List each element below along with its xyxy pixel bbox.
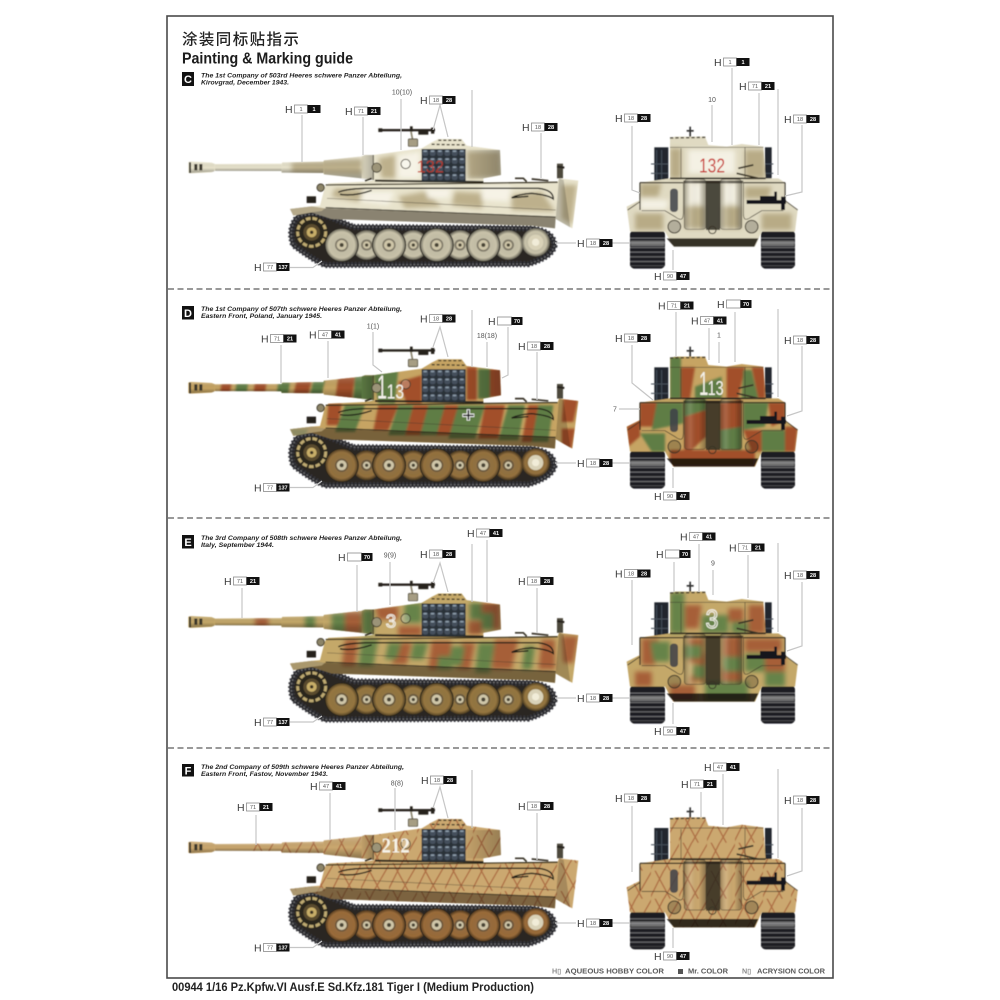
panel E heading: E <box>184 537 192 549</box>
callout: E rear H90 47: 47 <box>680 729 686 735</box>
callout: F rear H47 41: 41 <box>730 765 736 771</box>
tank E rear view <box>627 582 798 724</box>
callout: D rear H70: 70 <box>743 302 749 308</box>
footer title: 00944 1/16 Pz.Kpfw.VI Ausf.E Sd.Kfz.181 Tiger I (Medium Production) <box>172 981 534 994</box>
callout: C H1 1: H <box>285 104 293 116</box>
callout: F H18 28 hull: 28 <box>544 804 550 810</box>
callout: E rear H70 <box>656 549 690 592</box>
callout: E rear H18 28 left: 18 <box>628 572 634 578</box>
callout: F rear H18 28 right: 28 <box>810 798 816 804</box>
callout: F H77 137: H <box>254 942 262 954</box>
leader line C turret <box>471 90 473 147</box>
callout: F H18 28 tracks: H <box>577 918 585 930</box>
leader line C rear <box>777 89 779 175</box>
callout: F rear H47 41 <box>704 762 740 825</box>
callout: E decal 9(9) <box>384 552 396 605</box>
callout: D rear H18 28 left: 28 <box>641 336 647 342</box>
callout: F decal 8(8): 8(8) <box>391 780 403 788</box>
callout: D rear H47 41: 47 <box>704 318 710 324</box>
callout: D rear H18 28 right: 28 <box>810 338 816 344</box>
callout: C rear H18 28 left <box>615 113 650 193</box>
callout: E rear H90 47 <box>654 703 690 738</box>
callout: F H18 28 hull: 18 <box>531 804 537 810</box>
callout: C rear decal 10: 10 <box>708 97 716 104</box>
callout: D H71 21: 71 <box>274 336 280 342</box>
callout: C H77 137: 137 <box>278 265 288 271</box>
leader line F turret <box>471 770 473 828</box>
callout: D rear H47 41 <box>691 316 726 360</box>
callout: F H47 41: H <box>310 781 318 793</box>
callout: F H47 41: 41 <box>336 784 342 790</box>
callout: F H18 28 turret: 28 <box>447 778 453 784</box>
panel F heading <box>182 764 404 778</box>
callout: C rear H18 28 right: 28 <box>810 117 816 123</box>
legend: paint brands: Mr. COLOR <box>688 966 729 976</box>
callout: C rear H18 28 left: 18 <box>628 116 634 122</box>
callout: E H71 21: 71 <box>237 579 243 585</box>
panel C heading <box>182 72 402 86</box>
callout: E H70 <box>338 552 372 612</box>
tank D rear view: 13 <box>708 378 724 400</box>
legend: paint brands: ACRYSION COLOR <box>757 966 826 976</box>
tank D side view <box>188 347 578 485</box>
callout: E rear H47 41 <box>680 532 716 592</box>
legend: paint brands: N▯ <box>742 966 751 976</box>
callout: C H18 28 turret: 18 <box>433 98 439 104</box>
callout: E H18 28 turret: H <box>420 549 428 561</box>
callout: C rear H71 21: 21 <box>765 84 771 90</box>
callout: C H71 21: 71 <box>358 109 364 115</box>
callout: C rear H18 28 left: H <box>615 113 623 125</box>
callout: C rear H18 28 right: 18 <box>797 117 803 123</box>
callout: D H18 28 tracks: H <box>577 458 585 470</box>
callout: D rear H71 21: H <box>658 300 666 312</box>
callout: D H70 <box>488 316 522 378</box>
callout: F rear H18 28 right: 18 <box>797 798 803 804</box>
tank E side view <box>188 581 578 719</box>
leader line D turret <box>471 310 473 367</box>
tank F side view <box>188 806 582 945</box>
callout: D H71 21 <box>261 334 296 383</box>
callout: C rear H18 28 right: H <box>784 114 792 126</box>
callout: F H71 21: 21 <box>263 805 269 811</box>
callout: D rear decal 1: 1 <box>717 332 721 340</box>
callout: D H70: 70 <box>514 319 520 325</box>
callout: D H18 28 tracks: 28 <box>603 461 609 467</box>
callout: C decal 10(10): 10(10) <box>392 90 412 96</box>
tank E side view: 3 <box>386 610 396 631</box>
callout: C rear H1 1 <box>714 57 750 145</box>
callout: E H70: 70 <box>364 555 370 561</box>
tank F side view: 212 <box>382 836 410 858</box>
callout: C H18 28 tracks: H <box>577 238 585 250</box>
title: 涂装同标贴指示 <box>182 28 300 50</box>
panel C heading: The 1st Company of 503rd Heeres schwere Panzer Abteilung, <box>201 74 402 80</box>
leader line D rear <box>777 309 779 397</box>
tank C rear view <box>627 127 798 269</box>
callout: E H18 28 tracks: H <box>577 693 585 705</box>
callout: C rear H90 47: 47 <box>680 274 686 280</box>
callout: E rear H71 21 <box>729 542 764 598</box>
callout: C H18 28 hull <box>522 122 558 178</box>
leader line F rear <box>777 769 779 858</box>
callout: C H18 28 turret <box>420 95 456 137</box>
callout: C H71 21: H <box>345 106 353 118</box>
callout: C decal 10(10) <box>392 90 412 150</box>
callout: D rear H71 21: 21 <box>684 304 690 310</box>
callout: F H77 137: 137 <box>278 946 288 952</box>
callout: E H71 21: 21 <box>250 579 256 585</box>
callout: D decal 1(1) <box>367 324 382 372</box>
callout: F rear H18 28 right: H <box>784 795 792 807</box>
panel E heading: Italy, September 1944. <box>201 543 274 549</box>
title: Painting & Marking guide <box>182 50 353 68</box>
callout: D rear H18 28 left: H <box>615 333 623 345</box>
tank C rear view: 132 <box>699 155 725 178</box>
callout: E H18 28 hull: H <box>518 576 526 588</box>
callout: E rear H71 21: H <box>729 542 737 554</box>
panel F heading: F <box>185 766 192 778</box>
panel C heading: C <box>184 74 192 86</box>
callout: F rear H71 21 <box>681 779 716 817</box>
callout: E H77 137: 77 <box>267 720 273 726</box>
callout: F rear H90 47: 47 <box>680 954 686 960</box>
callout: F rear H47 41: H <box>704 762 712 774</box>
callout: D H18 28 hull: 18 <box>531 344 537 350</box>
callout: F rear H90 47: 90 <box>667 954 673 960</box>
panel E heading <box>182 535 402 549</box>
callout: C H18 28 hull: 28 <box>548 125 554 131</box>
callout: D rear H18 28 right: H <box>784 335 792 347</box>
callout: C rear H71 21: 71 <box>752 84 758 90</box>
callout: C H18 28 hull: 18 <box>535 125 541 131</box>
callout: C H77 137 <box>254 261 322 274</box>
callout: C rear H90 47: 90 <box>667 274 673 280</box>
tank E rear view: 3 <box>706 604 718 634</box>
callout: F rear H18 28 left <box>615 793 650 872</box>
callout: F H71 21: 71 <box>250 805 256 811</box>
callout: D H18 28 tracks <box>555 458 630 470</box>
callout: E H77 137: 137 <box>278 720 288 726</box>
tank D side view: 13 <box>387 382 404 404</box>
callout: D rear H71 21 <box>658 300 694 357</box>
callout: D rear H18 28 right: 18 <box>797 338 803 344</box>
callout: F H18 28 hull <box>518 801 554 860</box>
tank C side view: 132 <box>417 157 444 177</box>
callout: E H47 41: 47 <box>480 531 486 537</box>
callout: F H18 28 turret: H <box>421 775 429 787</box>
panel D heading: D <box>184 308 192 320</box>
callout: E H18 28 turret <box>420 549 456 592</box>
callout: D rear H70: H <box>717 299 725 311</box>
callout: C rear H1 1: 1 <box>728 60 732 66</box>
callout: E rear H90 47: 90 <box>667 729 673 735</box>
callout: D H18 28 hull: H <box>518 341 526 353</box>
callout: C H18 28 tracks: 28 <box>603 241 609 247</box>
callout: D H18 28 turret: 28 <box>446 316 452 322</box>
legend: paint brands: AQUEOUS HOBBY COLOR <box>565 966 665 976</box>
callout: D rear H71 21: 71 <box>671 304 677 310</box>
callout: C H18 28 tracks: 18 <box>590 241 596 247</box>
callout: D H18 28 turret: 18 <box>433 316 439 322</box>
tank D rear view: 1 <box>699 366 708 403</box>
callout: C H77 137: H <box>254 262 262 274</box>
callout: F H18 28 tracks: 28 <box>603 921 609 927</box>
callout: F rear H18 28 left: H <box>615 793 623 805</box>
callout: C rear H1 1: H <box>714 57 722 69</box>
callout: C rear H90 47: H <box>654 271 662 283</box>
panel C heading: Kirovgrad, December 1943. <box>201 80 289 86</box>
callout: D H70: H <box>488 316 496 328</box>
callout: E H70: H <box>338 552 346 564</box>
callout: D rear H18 28 right <box>784 335 820 416</box>
callout: D H47 41: 41 <box>335 332 341 338</box>
callout: E H77 137: H <box>254 717 262 729</box>
callout: E rear H90 47: H <box>654 726 662 738</box>
callout: E H18 28 hull <box>518 576 554 633</box>
callout: F rear H18 28 right <box>784 795 820 876</box>
panel F heading: The 2nd Company of 509th schwere Heeres Panzer Abteilung, <box>201 765 404 771</box>
callout: C rear decal 10 <box>708 97 716 142</box>
callout: F H18 28 tracks <box>555 918 630 930</box>
callout: D H77 137: H <box>254 482 262 494</box>
callout: E H18 28 turret: 28 <box>446 552 452 558</box>
callout: F H77 137 <box>254 941 322 954</box>
callout: C rear H18 28 left: 28 <box>641 116 647 122</box>
callout: D H71 21: 21 <box>287 336 293 342</box>
callout: F rear H47 41: 47 <box>717 765 723 771</box>
tank D side view: 1 <box>377 370 387 407</box>
callout: D rear H47 41: 41 <box>717 318 723 324</box>
callout: D rear H47 41: H <box>691 316 699 328</box>
callout: E H18 28 hull: 18 <box>531 579 537 585</box>
callout: F H47 41 <box>310 781 346 840</box>
callout: F rear H71 21: H <box>681 779 689 791</box>
callout: E rear H18 28 right: H <box>784 570 792 582</box>
callout: F decal 8(8) <box>391 780 403 830</box>
callout: D H18 28 hull: 28 <box>544 344 550 350</box>
callout: D decal 18(18): 18(18) <box>477 333 497 340</box>
panel D heading: The 1st Company of 507th schwere Heeres Panzer Abteilung, <box>201 307 402 313</box>
leader line E turret <box>471 544 473 602</box>
callout: E H71 21: H <box>224 576 232 588</box>
callout: D H77 137: 77 <box>267 486 273 492</box>
callout: D H18 28 tracks: 18 <box>590 461 596 467</box>
callout: D rear decal 7: 7 <box>613 406 617 414</box>
callout: E H47 41: H <box>467 528 475 540</box>
tank D rear view <box>627 347 798 489</box>
callout: F rear H18 28 left: 28 <box>641 796 647 802</box>
callout: D H18 28 hull <box>518 341 554 400</box>
callout: F H47 41: 47 <box>323 784 329 790</box>
callout: E rear H18 28 left <box>615 568 650 645</box>
panel: guide frame <box>167 16 833 978</box>
tank F rear view <box>625 807 798 949</box>
callout: D decal 1(1): 1(1) <box>367 324 379 330</box>
callout: D H71 21: H <box>261 334 269 346</box>
callout: D rear decal 7 <box>613 406 640 414</box>
callout: E rear H18 28 right: 28 <box>810 573 816 579</box>
legend: paint brands <box>552 966 826 976</box>
callout: D rear H18 28 left <box>615 333 653 400</box>
callout: D H47 41 <box>309 330 344 378</box>
callout: E rear H18 28 left: H <box>615 568 623 580</box>
callout: E rear decal 9 <box>711 560 715 595</box>
callout: C H18 28 turret: 28 <box>446 98 452 104</box>
callout: F rear H71 21: 21 <box>707 782 713 788</box>
callout: D rear H90 47: 90 <box>667 494 673 500</box>
callout: D rear H90 47: H <box>654 491 662 503</box>
callout: D rear H90 47: 47 <box>680 494 686 500</box>
callout: E decal 9(9): 9(9) <box>384 552 396 560</box>
callout: D H47 41: 47 <box>322 332 328 338</box>
callout: F rear H90 47 <box>654 928 690 963</box>
callout: E rear H71 21: 71 <box>742 546 748 552</box>
callout: F rear H71 21: 71 <box>694 782 700 788</box>
callout: F H18 28 turret <box>421 775 456 818</box>
callout: F H18 28 hull: H <box>518 801 526 813</box>
callout: F H18 28 tracks: 18 <box>590 921 596 927</box>
callout: E H18 28 tracks <box>555 693 630 705</box>
callout: C H1 1: 1 <box>299 107 303 113</box>
callout: E rear H18 28 right: 18 <box>797 573 803 579</box>
callout: E H18 28 turret: 18 <box>433 552 439 558</box>
callout: E H71 21 <box>224 576 260 618</box>
callout: C H1 1: 1 <box>312 107 316 113</box>
callout: D H47 41: H <box>309 330 317 342</box>
callout: E rear H47 41: 47 <box>693 534 699 540</box>
title <box>182 28 353 68</box>
callout: D H77 137 <box>254 481 322 494</box>
callout: E rear H70: H <box>656 549 664 561</box>
callout: C H18 28 turret: H <box>420 95 428 107</box>
callout: E H77 137 <box>254 716 322 729</box>
callout: E H18 28 tracks: 28 <box>603 696 609 702</box>
callout: F H71 21: H <box>237 802 245 814</box>
callout: E rear H47 41: H <box>680 532 688 544</box>
callout: C rear H71 21 <box>739 81 774 145</box>
callout: D H18 28 turret: H <box>420 314 428 326</box>
panel D heading <box>182 306 402 320</box>
callout: C H77 137: 77 <box>267 265 273 271</box>
callout: E H18 28 hull: 28 <box>544 579 550 585</box>
callout: D rear H18 28 left: 18 <box>628 336 634 342</box>
callout: C rear H71 21: H <box>739 81 747 93</box>
callout: C H71 21 <box>345 106 380 155</box>
callout: E H18 28 tracks: 18 <box>590 696 596 702</box>
callout: E rear decal 9: 9 <box>711 560 715 568</box>
callout: F H18 28 turret: 18 <box>434 778 440 784</box>
callout: C H1 1 <box>285 104 320 162</box>
callout: E rear H71 21: 21 <box>755 546 761 552</box>
panel E heading: The 3rd Company of 508th schwere Heeres Panzer Abteilung, <box>201 536 402 542</box>
leader line E rear <box>777 543 779 632</box>
callout: E H47 41 <box>467 528 502 602</box>
callout: F H71 21 <box>237 802 272 845</box>
callout: C H71 21: 21 <box>371 109 377 115</box>
callout: D H18 28 turret <box>420 314 456 357</box>
callout: C H18 28 tracks <box>555 238 630 250</box>
callout: D rear decal 1 <box>717 332 721 363</box>
legend: paint brands: H▯ <box>552 966 561 976</box>
tank C side view <box>188 126 578 265</box>
callout: E rear H47 41: 41 <box>706 534 712 540</box>
callout: D rear H90 47 <box>654 468 690 503</box>
callout: C rear H18 28 right <box>784 114 820 196</box>
callout: E rear H18 28 right <box>784 570 820 651</box>
panel F heading: Eastern Front, Fastov, November 1943. <box>201 772 328 778</box>
callout: F H77 137: 77 <box>267 946 273 952</box>
panel D heading: Eastern Front, Poland, January 1945. <box>201 314 322 320</box>
callout: D rear H70 <box>717 299 752 362</box>
callout: C rear H1 1: 1 <box>741 60 745 66</box>
callout: E rear H70: 70 <box>682 552 688 558</box>
callout: E rear H18 28 left: 28 <box>641 572 647 578</box>
callout: C rear H90 47 <box>654 250 690 283</box>
callout: F rear H90 47: H <box>654 951 662 963</box>
callout: D decal 18(18) <box>477 333 497 367</box>
callout: E H47 41: 41 <box>493 531 499 537</box>
callout: D H77 137: 137 <box>278 486 288 492</box>
callout: F rear H18 28 left: 18 <box>628 796 634 802</box>
callout: C H18 28 hull: H <box>522 122 530 134</box>
